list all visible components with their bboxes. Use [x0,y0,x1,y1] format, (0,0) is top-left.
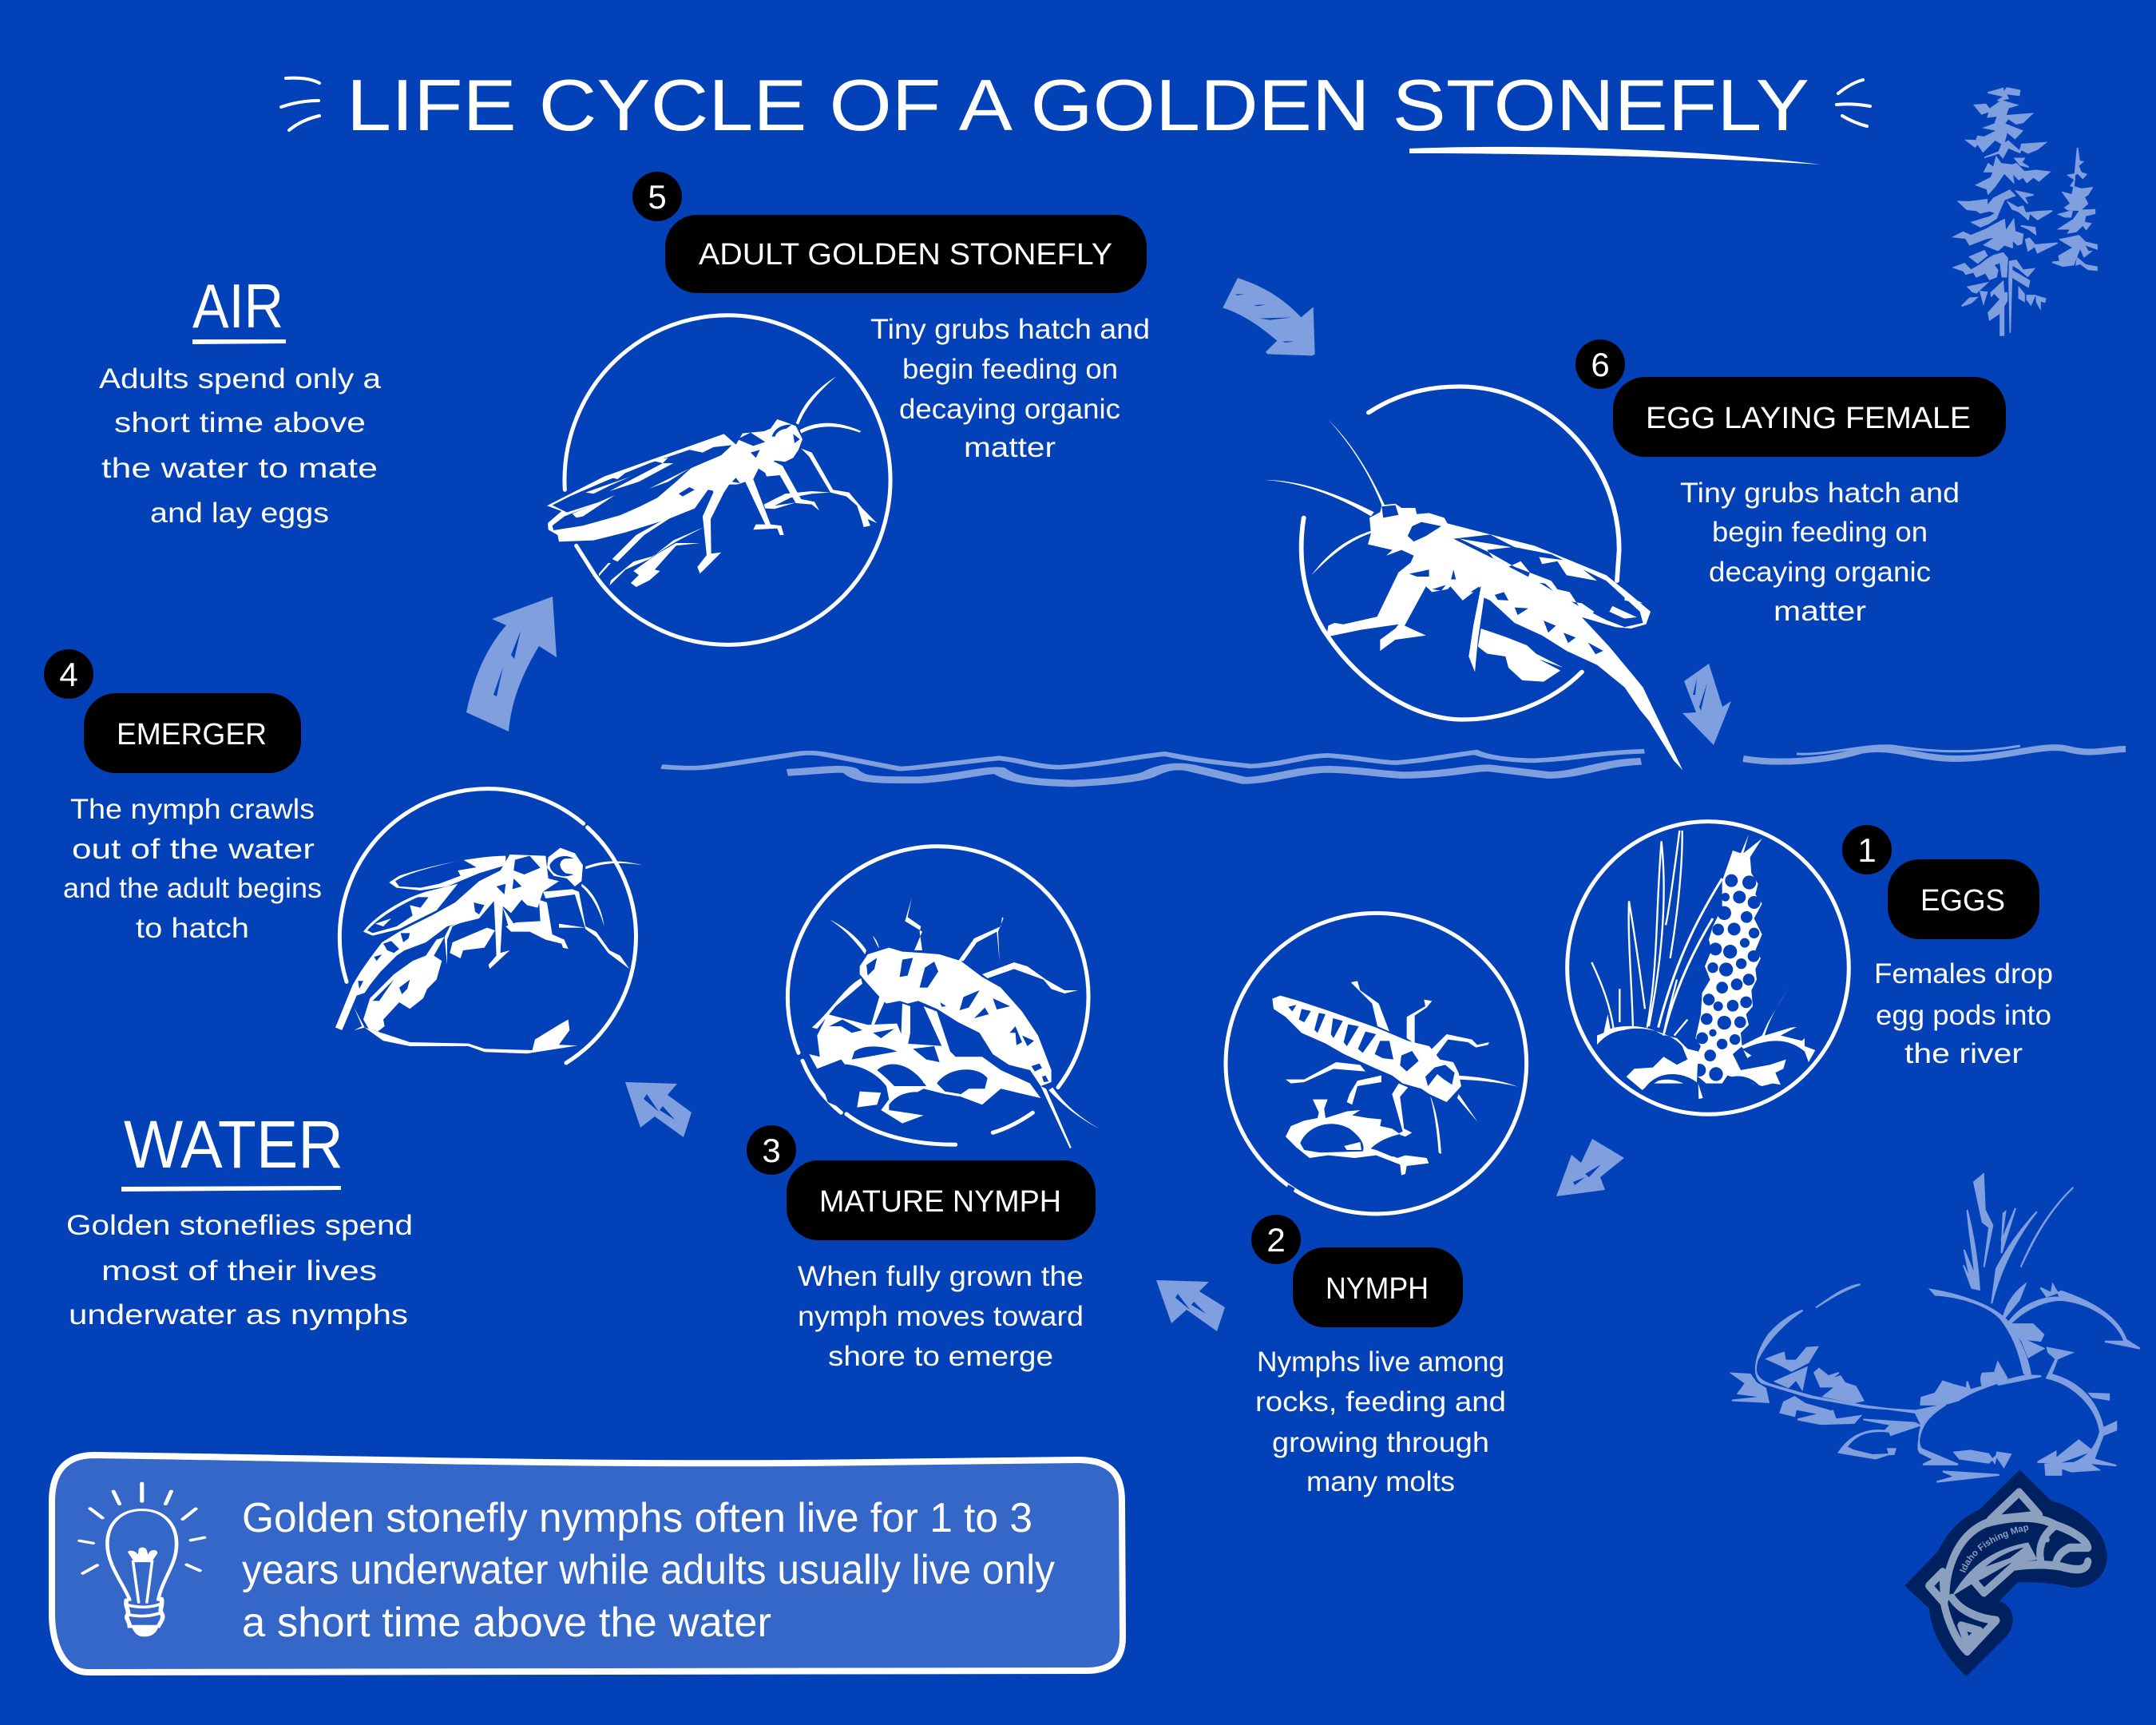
text: step 6: decaying organic [1709,557,1931,588]
arrow: 4 to 5 [466,597,557,732]
air heading and text: short time above [114,407,366,438]
badge: 3 [747,1125,796,1175]
river waves [661,746,2126,783]
text: step 3: shore to emerge [828,1341,1053,1372]
text: step 4: to hatch [136,913,249,944]
text: step 2: many molts [1306,1466,1455,1497]
arrow: 2 to 3 [1156,1280,1225,1331]
label: emerger: EMERGER [117,718,267,751]
callout text [242,1495,1055,1646]
badge: 5: 5 [648,178,667,216]
badge: 4 [44,649,93,699]
text: step 4: and the adult begins [63,873,322,904]
text: step 1: egg pods into [1876,1000,2051,1031]
arrow: 6 to 1 [1682,664,1731,745]
callout text: a short time above the water [242,1600,771,1646]
text: step 3: nymph moves toward [798,1301,1084,1332]
water heading and text [66,1107,413,1330]
label: egg laying female [1613,377,2006,457]
illustration: rocks and grass [1732,1174,2140,1482]
text: step 5: Tiny grubs hatch and [870,314,1150,345]
label: mature nymph: MATURE NYMPH [819,1185,1061,1219]
badge: 2 [1251,1215,1301,1264]
air heading and text: AIR [192,271,283,341]
label: adult golden stonefly: ADULT GOLDEN STONEFLY [699,238,1112,272]
label: nymph: NYMPH [1326,1272,1429,1306]
text: step 5: matter [964,432,1056,463]
badge: 6: 6 [1591,346,1610,383]
air heading and text: and lay eggs [150,498,329,529]
water heading and text: most of their lives [101,1255,377,1287]
text: step 1: the river [1904,1038,2023,1069]
text: step 2 [1255,1346,1506,1497]
illustration: emerger in circle [335,789,643,1063]
callout: lifespan fact [52,1455,1123,1672]
label: mature nymph [787,1160,1096,1240]
text: step 4: out of the water [72,834,315,865]
badge: 4: 4 [59,656,78,693]
text: step 3 [798,1261,1084,1372]
text: step 1 [1874,958,2053,1069]
text: step 5: begin feeding on [902,354,1118,385]
badge: 6 [1575,339,1625,389]
air heading and text: Adults spend only a [99,363,382,395]
illustration: nymph in circle [1226,913,1527,1214]
title: LIFE CYCLE OF A GOLDEN STONEFLY [347,65,1809,146]
text: step 2: rocks, feeding and [1255,1386,1506,1418]
illustration: egg laying female in circle [1264,387,1682,770]
text: step 2: Nymphs live among [1257,1346,1504,1378]
air heading and text: the water to mate [101,453,378,484]
badge: 3: 3 [762,1132,781,1169]
icon: light bulb [80,1483,204,1636]
callout text: Golden stonefly nymphs often live for 1 to 3 [242,1495,1032,1541]
text: step 6: Tiny grubs hatch and [1680,478,1960,509]
illustration: eggs in circle [1567,822,1849,1114]
illustration: adult stonefly in circle [547,315,890,644]
arrow: 5 to 6 [1223,278,1315,355]
panel: step 4 emerger [44,649,643,1063]
badge: 1: 1 [1857,831,1877,869]
panel: step 3 mature nymph [747,847,1100,1372]
label: eggs: EGGS [1920,884,2005,918]
illustration: mature nymph in circle [787,847,1100,1148]
water heading and text: underwater as nymphs [69,1299,408,1330]
panel: step 5 adult [547,172,1150,644]
text: step 6 [1680,478,1960,627]
text: step 6: begin feeding on [1712,517,1928,548]
air heading and text [99,271,382,529]
text: step 5 [870,314,1150,463]
label: egg laying female: EGG LAYING FEMALE [1646,402,1971,435]
callout text: years underwater while adults usually live only [242,1547,1055,1593]
label: emerger [84,693,301,773]
label: eggs [1888,859,2039,939]
badge: 1 [1842,825,1892,874]
logo: idaho fishing map fish: Idaho Fishing Map [1960,1525,2028,1573]
title [281,65,1870,165]
label: adult golden stonefly [665,215,1147,293]
water heading and text: Golden stoneflies spend [66,1210,413,1241]
arrow: 3 to 4 [625,1082,692,1137]
label: nymph [1293,1247,1463,1327]
icon: trees [1954,88,2097,335]
logo: idaho fishing map fish [1904,1469,2107,1677]
text: step 4 [63,794,322,944]
arrow: 1 to 2 [1556,1139,1624,1196]
text: step 3: When fully grown the [798,1261,1084,1292]
text: step 4: The nymph crawls [70,794,315,825]
badge: 5 [632,172,682,221]
water heading and text: WATER [124,1107,343,1182]
panel: step 2 nymph [1226,913,1527,1497]
badge: 2: 2 [1266,1221,1286,1259]
text: step 6: matter [1774,596,1866,627]
panel: step 1 eggs [1567,822,2053,1114]
text: step 5: decaying organic [899,394,1120,425]
text: step 2: growing through [1272,1427,1489,1458]
panel: step 6 egg laying female [1264,339,2006,770]
text: step 1: Females drop [1874,958,2053,989]
